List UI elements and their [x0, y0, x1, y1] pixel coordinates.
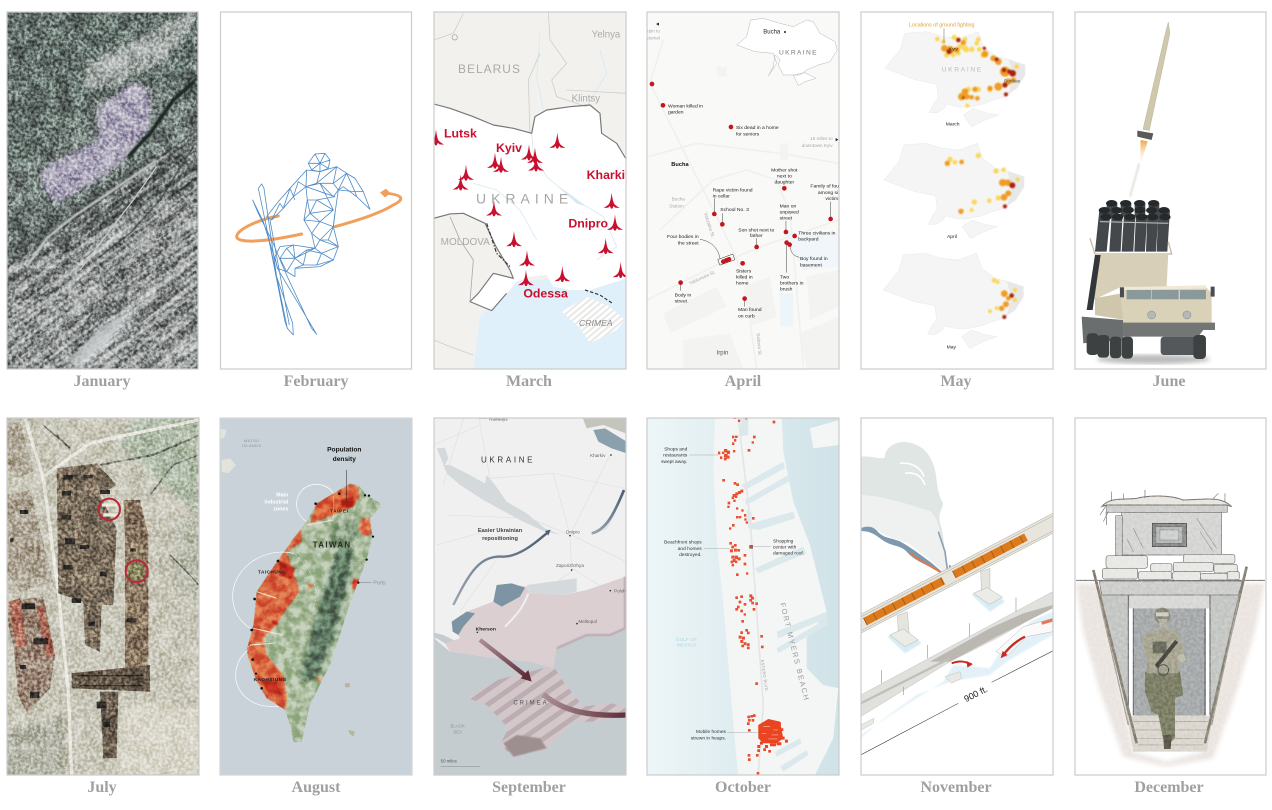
port markers: [250, 492, 374, 690]
panel: April Bucha map: unpaved: [780, 210, 799, 216]
arrow: Russian supply lines: [480, 640, 627, 715]
panel: April Bucha map: Body in: [675, 293, 691, 299]
panel: October Fort Myers Beach map: swept away.: [661, 459, 687, 465]
panel: June rocket launcher illustration: [1075, 12, 1266, 369]
occupied territory: [445, 577, 626, 668]
panel: October Fort Myers Beach map: Shopping: [773, 538, 794, 544]
concrete beam: [1099, 581, 1243, 595]
panel: April Bucha map: father: [750, 233, 763, 239]
panel: April Bucha map: Rape victim found: [713, 187, 753, 193]
sandbags: [1102, 554, 1239, 580]
panel: September Kherson map: Easier Ukrainian: [478, 528, 523, 534]
map: May fighting: [883, 253, 1023, 351]
panel: April Bucha map: daughter: [774, 179, 794, 185]
panel: October Fort Myers Beach map: center with: [773, 545, 797, 551]
panel: April Bucha map: Irpin: [717, 350, 728, 356]
panel: April Bucha map: 16 miles to: [810, 136, 833, 141]
label: May: May: [940, 373, 972, 390]
panel: April Bucha map: basement: [800, 262, 822, 268]
Crimea hatched: [562, 297, 625, 343]
panel: March Ukraine strikes map: Lutsk: [444, 127, 477, 141]
panel: May ground fighting maps: [861, 12, 1053, 369]
illustration: skier with orange rotation ring: [237, 153, 401, 335]
panel: September Kherson map: Zaporizhzhya: [556, 563, 584, 568]
panel: April Bucha map: brush: [780, 287, 793, 293]
panel: August Taiwan density map: TAIWAN: [313, 541, 352, 550]
panel: April Bucha map: Station: [669, 203, 684, 208]
panel: April Bucha map: killed in: [736, 274, 753, 280]
support planks: [1093, 567, 1247, 743]
panel: September Kherson map: Railways: [489, 416, 508, 421]
label: December: December: [1134, 779, 1204, 796]
strike markers: [428, 129, 629, 286]
panel: October Fort Myers Beach map: ESTERO BLVD.: [760, 659, 769, 693]
panel: November Kerch bridge: [857, 415, 1057, 778]
panel: April Bucha map: next to: [777, 173, 792, 179]
panel: March Ukraine strikes map: Dnipro: [568, 217, 609, 231]
panel: March Ukraine strikes map: Yelnya: [592, 29, 621, 40]
label: October: October: [715, 779, 771, 796]
panel: April Bucha map: Sadova St.: [756, 333, 763, 356]
map: May fighting: May: [947, 345, 957, 351]
panel: August Taiwan density map: TAICHUNG: [258, 570, 286, 575]
bunker building: [1100, 490, 1232, 557]
panel: December trench bunker: [1070, 415, 1270, 778]
panel: April Bucha map: Son shot next to: [738, 227, 775, 233]
panel: September Kherson map: [430, 415, 630, 778]
icon: rocket: [1130, 22, 1170, 197]
map: April fighting: April: [947, 234, 957, 240]
inset map: Ukraine: Bucha: [763, 29, 781, 35]
panel: September Kherson map: 50 miles: [441, 759, 457, 764]
panel: October Fort Myers Beach map: [643, 415, 843, 778]
panel: April Bucha map: Irpin to: [646, 28, 660, 33]
trench floor: [1127, 716, 1213, 752]
panel: April Bucha map: home: [736, 280, 749, 286]
panel: April Bucha map: street: [675, 299, 688, 305]
panel: August Taiwan density map: KAOHSIUNG: [254, 677, 287, 682]
label: June: June: [1153, 373, 1185, 390]
panel: July satellite steelworks: [7, 418, 200, 775]
icon: launcher truck: [1082, 200, 1215, 364]
steelworks buildings: [57, 463, 117, 652]
label: April: April: [725, 373, 762, 390]
panel: March Ukraine strikes map: MOLDOVA: [441, 237, 490, 248]
panel: April Bucha map: victims: [825, 196, 841, 202]
panel: April Bucha map: downtown Kyiv: [802, 143, 833, 148]
panel: October Fort Myers Beach map: and homes: [678, 546, 702, 552]
inset map: Ukraine: [737, 18, 837, 86]
panel: April Bucha map: Yablunska St.: [688, 269, 716, 286]
panel: April Bucha map: Hostomel: [640, 35, 660, 40]
Ukraine territory: [430, 103, 627, 310]
marker: red circles: [99, 499, 148, 582]
panel: August Taiwan density map: Main: [276, 493, 288, 499]
panel: April Bucha map: Family of four: [810, 184, 841, 190]
panel: September Kherson map: BLACK: [451, 724, 465, 729]
panel: April Bucha map: Sisters: [736, 268, 752, 274]
panel: September Kherson map: repositioning: [482, 536, 518, 542]
map: March fighting: [885, 23, 1025, 128]
map: March fighting: UKRAINE: [942, 67, 983, 74]
map: March fighting: March: [946, 122, 960, 128]
panel: April Bucha map: garden: [668, 110, 684, 116]
map: March fighting: Kyiv: [949, 47, 958, 52]
panel: April Bucha map: Vokzalna St.: [703, 212, 716, 238]
label: September: September: [492, 779, 566, 796]
panel: August Taiwan density map: Population: [327, 447, 361, 454]
panel: April Bucha map: Three civilians in: [798, 230, 836, 236]
panel: October Fort Myers Beach map: strewn in heaps.: [691, 735, 726, 741]
inset map: Ukraine: UKRAINE: [779, 49, 818, 56]
panel: April Bucha map: Six dead in a home: [736, 125, 779, 131]
panel: August Taiwan density map: industrial: [264, 500, 289, 506]
panel: March Ukraine strikes map: Kharkiv: [587, 168, 632, 182]
panel: September Kherson map: UKRAINE: [481, 455, 535, 464]
Crimea: [468, 668, 626, 757]
panel: October Fort Myers Beach map: MEXICO: [677, 643, 696, 648]
panel: September Kherson map: Polohy: [614, 588, 629, 593]
incident markers: [650, 82, 833, 301]
panel: March Ukraine strikes map: CRIMEA: [579, 318, 613, 328]
arrow: Ukrainian repositioning: [453, 490, 624, 605]
panel: April Bucha map: Four bodies in: [667, 234, 699, 240]
soldier: [1143, 608, 1186, 749]
damage squares: [718, 417, 775, 775]
roads: [25, 418, 199, 775]
panel: April Bucha map: [640, 10, 843, 373]
panel: August Taiwan density map: zones: [273, 506, 288, 512]
piers: [887, 568, 1005, 653]
panel: April Bucha map: Bucha: [671, 162, 689, 168]
label: July: July: [87, 779, 117, 796]
panel: October Fort Myers Beach map: damaged roof.: [773, 551, 804, 557]
panel: April Bucha map: backyard: [798, 237, 819, 243]
Russia corner: [582, 415, 630, 435]
panel: August Taiwan density map: density: [333, 456, 356, 463]
arrows: damage: [952, 620, 1053, 668]
panel: October Fort Myers Beach map: GULF OF: [676, 637, 697, 642]
panel: October Fort Myers Beach map: restaurants: [663, 453, 688, 459]
label: November: November: [920, 779, 992, 796]
sea: [473, 273, 626, 370]
Taiwan island: [247, 483, 383, 742]
panel: September Kherson map: CRIMEA: [513, 700, 549, 706]
panel: October Fort Myers Beach map: destroyed.: [679, 552, 702, 558]
panel: April Bucha map: Boy found in: [800, 256, 828, 262]
dimension line: [861, 651, 1053, 755]
label: August: August: [292, 779, 341, 796]
panel: April Bucha map: Two: [780, 275, 789, 281]
panel: April Bucha map: in cellar: [713, 194, 730, 200]
panel: October Fort Myers Beach map: Shops and: [664, 447, 688, 453]
land background: [430, 10, 630, 373]
map: April fighting: [884, 143, 1024, 240]
reservoirs: [437, 448, 577, 595]
panel: April Bucha map: Man found: [738, 307, 762, 313]
back walls: [1101, 595, 1239, 720]
upper rail bridge: [861, 513, 1053, 633]
smoke cloud: [861, 442, 950, 577]
panel: September Kherson map: Kherson: [476, 627, 496, 633]
panel: August Taiwan density map: MATSU: [244, 438, 259, 443]
panel: February skier mesh: [220, 12, 412, 369]
panel: October Fort Myers Beach map: Mobile homes: [696, 729, 727, 735]
panel: April Bucha map: for seniors: [736, 131, 760, 137]
panel: September Kherson map: Dnipro: [566, 529, 580, 534]
barrier island: [713, 415, 838, 778]
panel: August Taiwan density map: ISLANDS: [242, 443, 261, 448]
panel: August Taiwan density map: [218, 415, 415, 778]
panel: April Bucha map: Mother shot: [771, 167, 798, 173]
mobile home cluster: [757, 719, 788, 753]
panel: April Bucha map: street: [780, 216, 793, 222]
panel: September Kherson map: Melitopol: [578, 619, 597, 624]
panel: October Fort Myers Beach map: FORT MYERS BEACH: [778, 602, 811, 703]
panel: April Bucha map: among six: [818, 190, 841, 196]
sea: [430, 628, 630, 778]
panel: January satellite terrain: [0, 12, 346, 480]
panel: August Taiwan density map: Ports: [373, 581, 386, 587]
dimension line: 900 ft.: [962, 684, 989, 704]
panel: October Fort Myers Beach map: Beachfront shops: [664, 540, 702, 546]
panel: March Ukraine strikes map: UKRAINE: [476, 190, 573, 206]
label: January: January: [74, 373, 130, 390]
label: February: February: [284, 373, 348, 390]
map: March fighting: Locations of ground fighting: [909, 23, 974, 29]
population density: [247, 484, 372, 710]
panel: April Bucha map: brothers in: [780, 281, 804, 287]
panel: September Kherson map: SEA: [453, 730, 462, 735]
label: March: March: [506, 373, 552, 390]
panel: March Ukraine strikes map: [428, 10, 632, 373]
panel: August Taiwan density map: TAIPEI: [330, 508, 349, 513]
trench earth: [1076, 583, 1265, 767]
panel: April Bucha map: Woman killed in: [668, 103, 703, 109]
panel: April Bucha map: Man on: [780, 204, 796, 210]
map: March fighting: Donbas: [1004, 79, 1021, 84]
panel: April Bucha map: Bucha: [672, 197, 685, 202]
panel: March Ukraine strikes map: Odessa: [523, 287, 568, 301]
leader lines: [689, 455, 771, 732]
panel: April Bucha map: on curb: [738, 313, 755, 319]
canals: [738, 418, 827, 772]
panel: March Ukraine strikes map: BELARUS: [458, 62, 521, 76]
panel: March Ukraine strikes map: Klintsy: [572, 93, 600, 104]
lower road bridge: [861, 592, 1053, 738]
panel: September Kherson map: Kharkiv: [590, 453, 606, 458]
panel: April Bucha map: the street: [678, 240, 699, 246]
panel: April Bucha map: School No. 3: [720, 207, 749, 213]
panel: March Ukraine strikes map: Kyiv: [496, 141, 522, 155]
industrial zone arcs: [233, 484, 333, 707]
